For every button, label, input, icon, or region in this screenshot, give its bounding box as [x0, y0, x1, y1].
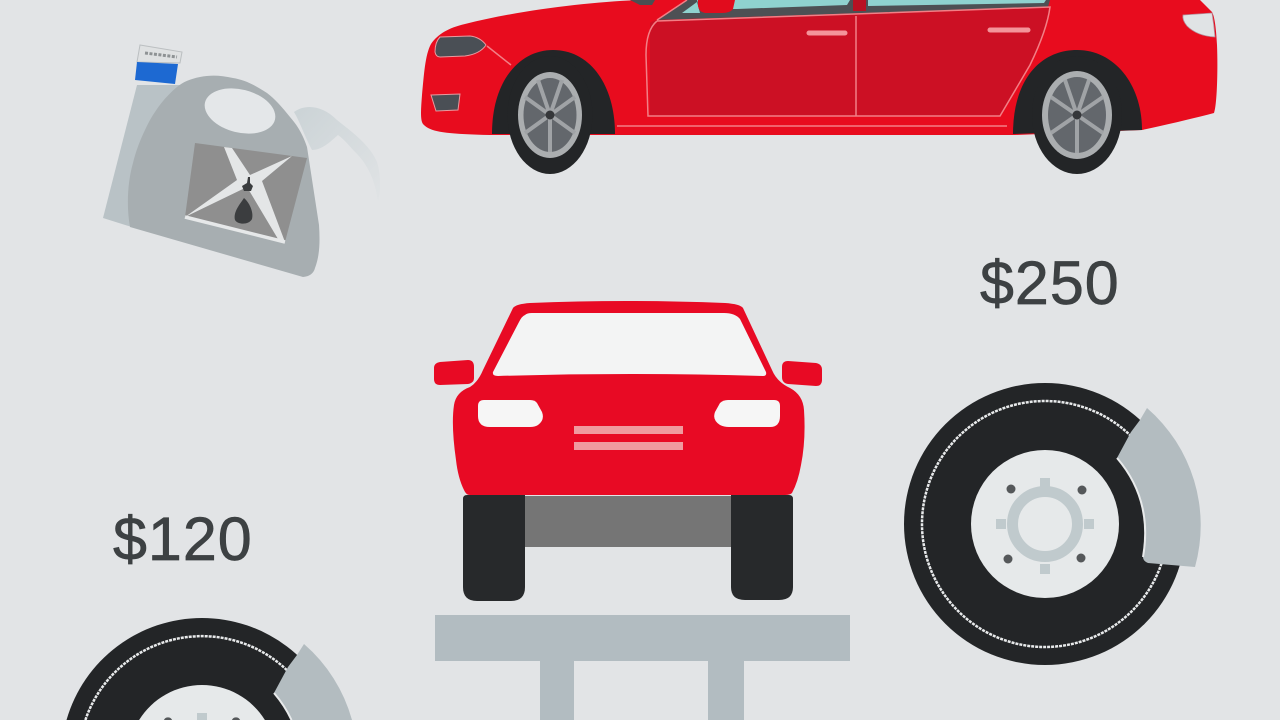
mirror [698, 0, 735, 13]
front wheel [492, 50, 615, 174]
rear wheel [1013, 50, 1142, 174]
hub stud [197, 713, 207, 720]
car body [421, 0, 1217, 135]
tire with wear, left [66, 618, 352, 720]
underbody [525, 496, 731, 547]
tire with wear, right [904, 383, 1201, 665]
mirrors [434, 360, 474, 385]
front vent [431, 94, 460, 111]
lift platform [435, 615, 850, 720]
hub bolts [1004, 484, 1086, 564]
window strip [657, 0, 1050, 20]
worn tread segment [274, 644, 352, 720]
jug body [128, 76, 320, 277]
jug blue band [135, 62, 178, 84]
door outlines [487, 0, 1050, 126]
doors [650, 7, 1050, 116]
headlight [435, 36, 486, 57]
side view red car [421, 0, 1217, 174]
car body [453, 301, 805, 495]
side mirror base [630, 0, 655, 5]
jug back panel [103, 85, 180, 228]
jug handle hole [200, 81, 280, 141]
hub ring [1012, 492, 1078, 556]
jug product label [185, 143, 307, 242]
front view red car [434, 301, 822, 601]
hub bolts [164, 717, 240, 720]
price: $120: $120 [113, 505, 253, 573]
door handles [809, 30, 1028, 33]
windshield [493, 313, 766, 376]
worn tread segment [1117, 408, 1201, 567]
window glass [682, 0, 1046, 13]
jug cap label [137, 45, 182, 63]
pillar [853, 0, 866, 11]
price: $250: $250 [980, 249, 1120, 317]
icon: oil jug [103, 45, 380, 277]
rear tires [463, 495, 525, 601]
jug spout [294, 107, 380, 202]
headlights [478, 400, 543, 427]
tail light [1183, 13, 1215, 37]
grille [574, 426, 683, 450]
